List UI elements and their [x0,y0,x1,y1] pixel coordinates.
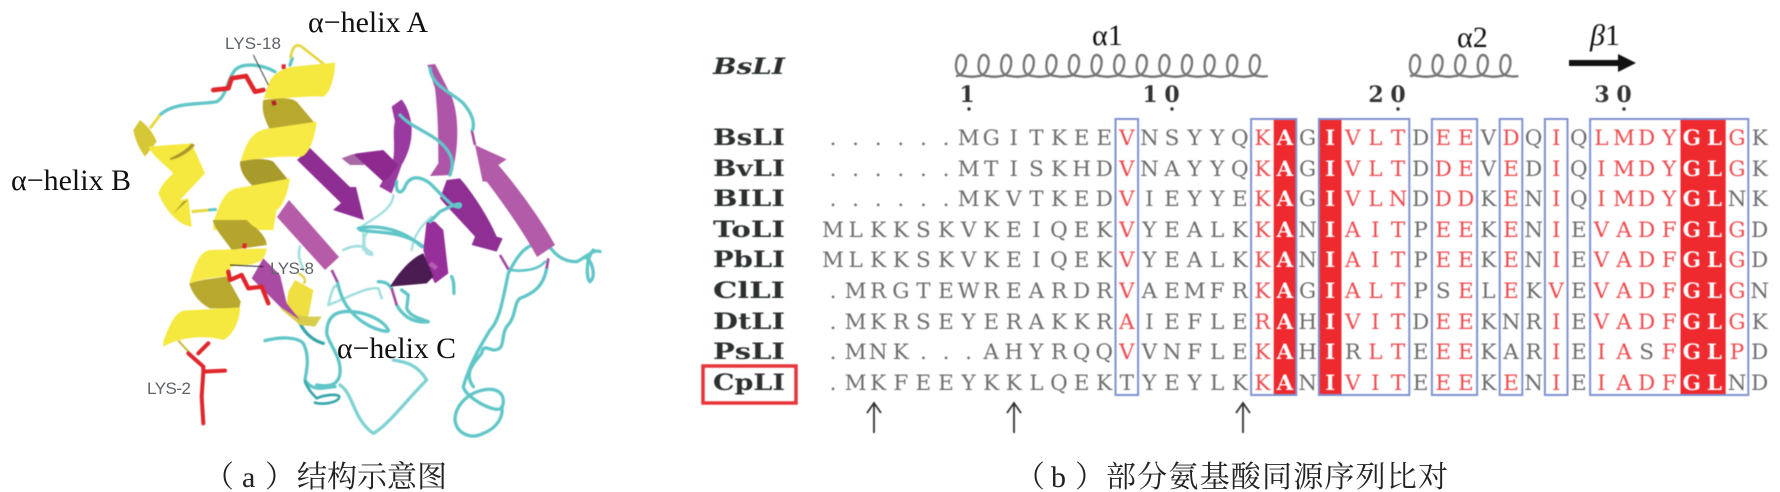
label alpha 2: α2 [1457,21,1488,54]
label: LYS-8: LYS-8 [270,259,314,278]
label: alpha-helix C: α−helix C [337,332,456,365]
upper loops [358,68,473,250]
species names: CpLI [713,370,785,396]
aligned sequences: .MKFEEYKKLQEKTYEYLK K AN I VIT E EE K EN I E IADF GL ND [830,371,1768,396]
conserved red columns [1274,119,1726,395]
residue numbers: 20 [1368,82,1406,108]
arrow beta 1 [1569,54,1636,72]
highlight box CpLI [703,366,796,403]
strands behind helix [252,148,364,320]
lower loops and right-hand loops [265,230,600,436]
species names: PbLI [713,247,785,273]
species names: ClLI [713,278,785,304]
residue numbers [959,82,1632,111]
species names: BvLI [713,156,785,182]
beta strands [342,64,555,257]
aligned sequences: MLKKSKVKEIQEK V YEALK K AN I AIT P EE K EN I E VADF GL G D [822,218,1768,243]
aligned sequences: MLKKSKVKEIQEK V YEALK K AN I AIT P EE K EN I E VADF GL G D [822,248,1768,273]
species names: BsLI [713,125,785,151]
aligned sequences: ......MKVTKED V IEYYE K A G I VLNDDD K EN I Q IMDY GL NK [830,187,1769,212]
aligned sequences: ......MGITKEE V NSYYQ K A G I VLT D EE V DQ I Q LMDY GL G K [830,126,1769,151]
header name BsLI: BsLI [712,54,786,80]
label: LYS-18: LYS-18 [225,34,281,53]
panel: protein structure [11,6,600,492]
aligned sequences: ......MTISKHD V NAYYQ K A G I VLT DDE V E D I Q IMDY GL G K [830,157,1769,182]
label beta 1: β1 [1589,19,1620,52]
ribbon model [133,45,600,436]
label alpha 1: α1 [1092,19,1123,52]
species names: DtLI [713,309,785,335]
residue numbers: 10 [1142,82,1180,108]
central small strand [332,222,548,305]
aligned sequences: .MNK...AHYRQQ V VNFLE K AH I R LT E EE KAR I E IA S F GL P D [830,340,1768,365]
species names: ToLI [713,217,785,243]
upper helix A and helix B [133,45,335,230]
label: LYS-2: LYS-2 [147,379,191,398]
panel: sequence alignment [703,19,1769,433]
species names [713,125,785,396]
secondary structure header [712,19,1636,80]
aligned sequences [822,126,1769,396]
species names: BILI [713,186,785,212]
caption a [204,461,447,492]
lower helix A [163,220,268,423]
lysine position arrows [867,403,1250,433]
aligned sequences: .MRGTEWREARDR V AEMFR K A G I ALT PS E L E K V E VADF GL GN [830,279,1769,304]
label: alpha-helix B: α−helix B [11,164,131,197]
coil alpha 2 [1410,55,1518,77]
label: alpha-helix A: α−helix A [308,6,428,39]
coil alpha 1 [956,55,1268,77]
residue numbers: 30 [1594,82,1632,108]
blue similarity boxes [1116,119,1748,395]
aligned sequences: .MKRSEYERAKKR A IEFLE R AH I VIT D EE KNR I E VADF GL G K [830,310,1769,335]
species names: PsLI [713,339,785,365]
residue numbers: 1 [959,82,975,108]
helix C [280,273,322,327]
